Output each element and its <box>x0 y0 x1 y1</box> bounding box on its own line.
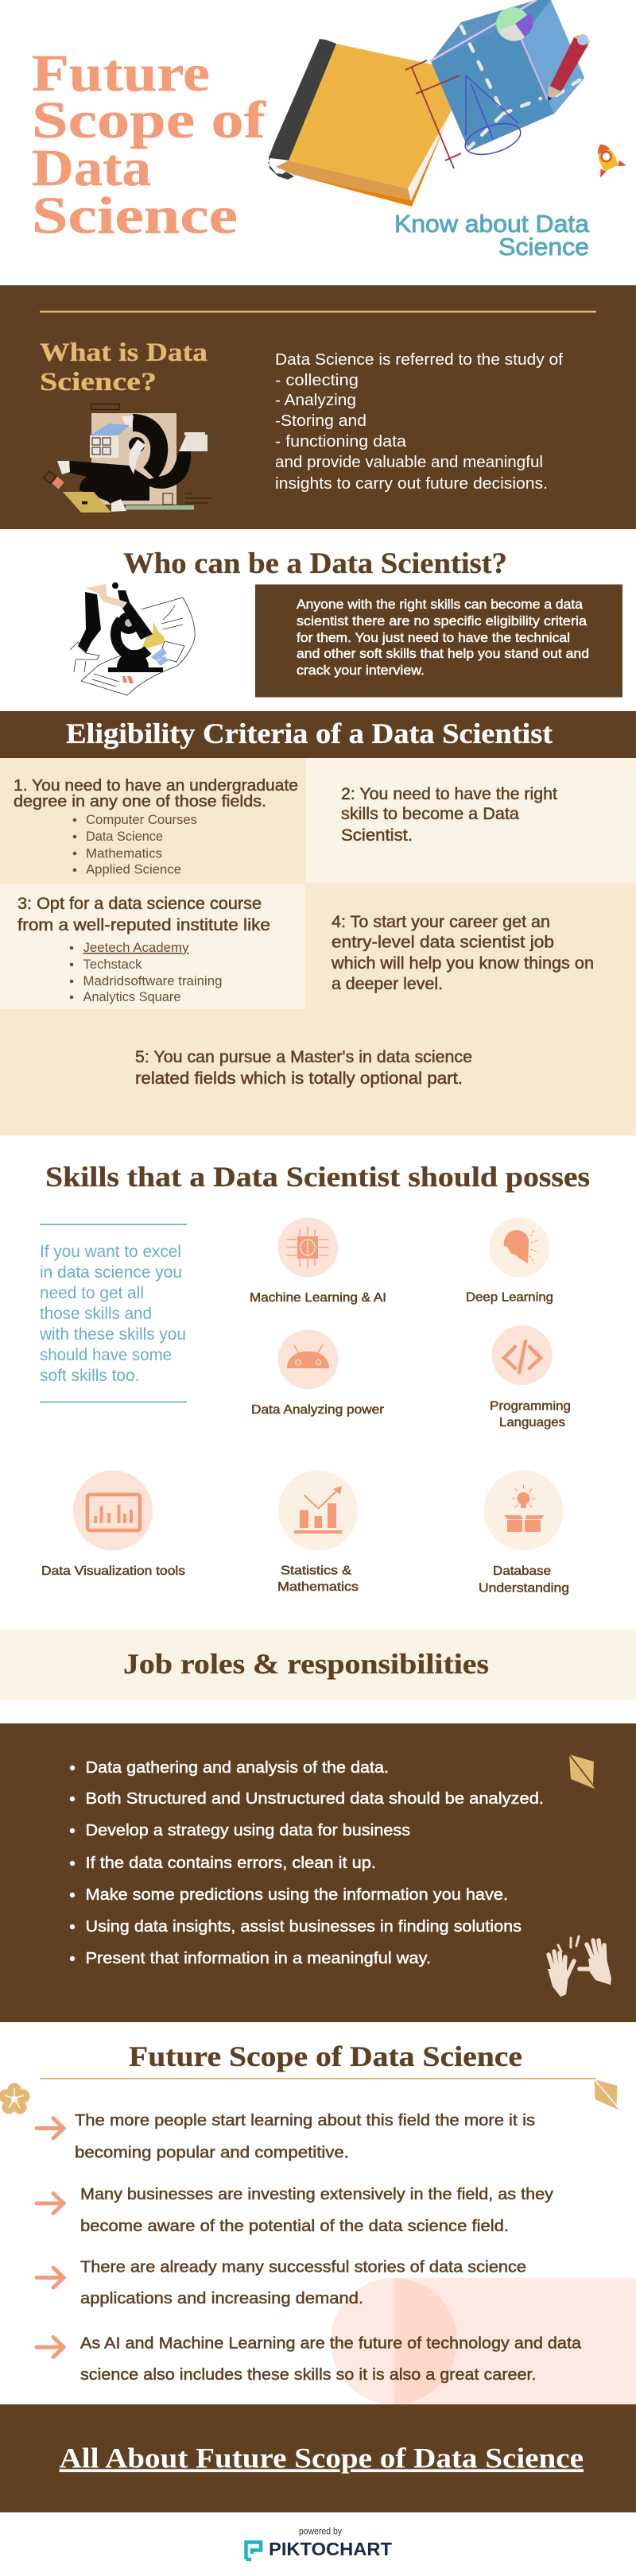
text block: definition <box>275 351 563 493</box>
scope item 1: becoming popular and competitive. <box>75 2144 349 2161</box>
heading: Skills that a Data Scientist should posses <box>45 1161 590 1193</box>
panel: closing banner: All About Future Scope of Data Science <box>59 2443 584 2474</box>
text block: definition: - collecting <box>275 372 359 389</box>
criterion 3: Analytics Square <box>83 990 181 1004</box>
callout: soft skills: If you want to excel <box>40 1243 181 1261</box>
icon: rocket <box>588 138 626 178</box>
criterion 4 <box>331 913 594 993</box>
list: responsibilities: Make some predictions using the information you have. <box>86 1886 508 1904</box>
arrow <box>37 2268 64 2288</box>
scope item 2: Many businesses are investing extensively in the field, as they <box>80 2185 554 2203</box>
icon: book <box>268 39 472 207</box>
text block: definition: -Storing and <box>275 412 366 430</box>
criterion 2: Scientist. <box>341 826 413 845</box>
text block: definition: - functioning data <box>275 433 407 451</box>
subtitle: Know about Data <box>394 210 590 238</box>
criterion 4: entry-level data scientist job <box>332 933 554 952</box>
skill: deep learning <box>466 1217 553 1305</box>
skill: statistics and mathematics: Statistics & <box>281 1564 351 1578</box>
criterion 3: Jeetech Academy <box>83 941 189 955</box>
panel: who can be a data scientist text: and other soft skills that help you stand out and <box>297 647 589 661</box>
icon: piktochart mark <box>246 2543 261 2559</box>
callout: soft skills: with these skills you <box>39 1325 186 1344</box>
callout: soft skills: should have some <box>40 1346 172 1364</box>
heading: Science? <box>40 368 157 396</box>
criterion 1 <box>0 758 306 884</box>
heading band: job roles: Job roles & responsibilities <box>123 1648 489 1680</box>
skill: database understanding: Database <box>493 1565 551 1578</box>
skill: data visualization tools: Data Visualization tools <box>41 1565 185 1578</box>
heading: Future Scope of Data Science <box>129 2040 522 2072</box>
list: responsibilities: Develop a strategy using data for business <box>86 1821 410 1839</box>
arrow <box>37 2118 64 2138</box>
criterion 1: degree in any one of those fields. <box>14 792 266 810</box>
arrow <box>37 2338 64 2357</box>
scope item 3: There are already many successful stories of data science <box>80 2258 526 2276</box>
footer: piktochart logo: PIKTOCHART <box>269 2539 392 2559</box>
scope item 3: applications and increasing demand. <box>80 2289 363 2307</box>
skill: data visualization tools <box>41 1470 185 1578</box>
criterion 3 <box>0 884 305 1009</box>
icon: flower <box>0 2083 30 2114</box>
illustration: microscope <box>70 582 195 695</box>
criterion 1: Mathematics <box>86 847 162 861</box>
panel: who can be a data scientist text <box>255 585 622 698</box>
skill: machine learning: Machine Learning & AI <box>250 1291 386 1305</box>
criterion 4: a deeper level. <box>332 975 443 993</box>
skill: database understanding: Understanding <box>479 1581 569 1595</box>
callout: soft skills: in data science you <box>40 1263 182 1282</box>
text block: definition: - Analyzing <box>275 392 356 409</box>
header band: Eligibility Criteria of a Data Scientist <box>66 717 553 749</box>
scope item 4: As AI and Machine Learning are the future of technology and data <box>80 2334 582 2352</box>
skill: database understanding <box>479 1470 569 1595</box>
text block: definition: and provide valuable and meaningful <box>275 454 543 471</box>
text block: definition: insights to carry out future decisions. <box>275 475 548 493</box>
skill: programming languages: Languages <box>499 1416 565 1429</box>
skill: machine learning <box>250 1217 386 1305</box>
title <box>32 44 266 245</box>
footer: piktochart logo: powered by <box>299 2527 342 2536</box>
skill: data analyzing power: Data Analyzing power <box>251 1403 385 1417</box>
criterion 4: which will help you know things on <box>331 954 594 973</box>
panel: who can be a data scientist text: for them. You just need to have the technical <box>297 631 570 645</box>
panel: who can be a data scientist text: crack your interview. <box>297 663 425 678</box>
criterion 2: skills to become a Data <box>341 805 519 823</box>
list: responsibilities <box>70 1758 544 1967</box>
arrow <box>37 2193 64 2214</box>
criterion 2 <box>341 785 557 845</box>
skill: programming languages <box>490 1325 571 1429</box>
title: Data <box>32 139 151 197</box>
scope item 4 <box>37 2334 582 2384</box>
scope item 1 <box>37 2111 535 2161</box>
heading <box>40 338 207 396</box>
list: responsibilities: If the data contains errors, clean it up. <box>86 1854 376 1872</box>
subtitle <box>394 210 590 261</box>
title: Future <box>32 44 210 102</box>
skill: data analyzing power <box>251 1330 385 1417</box>
panel: eligibility criteria <box>0 711 636 1135</box>
panel: who can be a data scientist text: Anyone with the right skills can become a data <box>297 598 584 612</box>
criterion 4: 4: To start your career get an <box>332 913 550 931</box>
panel: what is data science <box>0 285 636 529</box>
criterion 5: 5: You can pursue a Master's in data science <box>135 1048 472 1066</box>
scope item 2 <box>37 2185 554 2235</box>
footer: piktochart logo <box>246 2527 392 2559</box>
criterion 3: Techstack <box>83 957 142 972</box>
callout: soft skills: those skills and <box>40 1305 152 1323</box>
criterion 1: Applied Science <box>86 863 181 877</box>
title: Scope of <box>32 91 266 149</box>
panel: hero header <box>32 0 626 261</box>
icon: kite <box>595 2079 621 2110</box>
criterion 3: from a well-reputed institute like <box>17 916 270 934</box>
title: Science <box>32 187 238 245</box>
criterion 5 <box>135 1048 472 1088</box>
criterion 1: 1. You need to have an undergraduate <box>14 776 298 795</box>
icon: geometry cube <box>405 0 590 168</box>
panel: future scope <box>0 2040 636 2404</box>
icon: kite <box>569 1754 596 1789</box>
criterion 1: Data Science <box>86 830 163 844</box>
header band <box>0 711 636 758</box>
criterion 3: 3: Opt for a data science course <box>17 895 262 913</box>
heading: What is Data <box>40 338 207 367</box>
criterion 1: Computer Courses <box>86 813 197 827</box>
heading: who can be a data scientist: Who can be a Data Scientist? <box>123 547 507 580</box>
skill: deep learning: Deep Learning <box>466 1290 553 1305</box>
callout: soft skills: need to get all <box>40 1284 144 1302</box>
callout: soft skills: soft skills too. <box>40 1367 140 1385</box>
scope item 3 <box>37 2258 526 2307</box>
criterion 5: related fields which is totally optional part. <box>135 1069 463 1088</box>
criterion 2: 2: You need to have the right <box>341 785 557 803</box>
text block: definition: Data Science is referred to the study of <box>275 351 563 369</box>
list: responsibilities: Both Structured and Unstructured data should be analyzed. <box>86 1789 544 1808</box>
icon: clapping hands <box>548 1936 611 1997</box>
list: responsibilities: Using data insights, assist businesses in finding solutions <box>86 1917 522 1936</box>
list: responsibilities: Data gathering and analysis of the data. <box>86 1758 389 1777</box>
skill: statistics and mathematics <box>277 1470 359 1594</box>
panel: responsibilities <box>0 1723 636 2022</box>
skill: statistics and mathematics: Mathematics <box>277 1580 359 1594</box>
decorative shapes: pink background <box>331 2278 636 2404</box>
skill: programming languages: Programming <box>490 1400 571 1413</box>
scope item 1: The more people start learning about this field the more it is <box>75 2111 535 2129</box>
criterion 3: Madridsoftware training <box>83 974 223 988</box>
illustration: multitasking woman <box>44 404 213 512</box>
subtitle: Science <box>498 233 589 261</box>
scope item 4: science also includes these skills so it is also a great career. <box>80 2365 537 2384</box>
heading band: job roles <box>0 1630 636 1700</box>
panel: skills <box>39 1161 590 1595</box>
panel: closing banner <box>0 2404 636 2512</box>
list: responsibilities: Present that information in a meaningful way. <box>86 1949 431 1967</box>
callout: soft skills <box>39 1224 187 1403</box>
scope item 2: become aware of the potential of the data science field. <box>80 2217 509 2235</box>
panel: who can be a data scientist text: scientist there are no specific eligibility criteria <box>297 614 588 629</box>
